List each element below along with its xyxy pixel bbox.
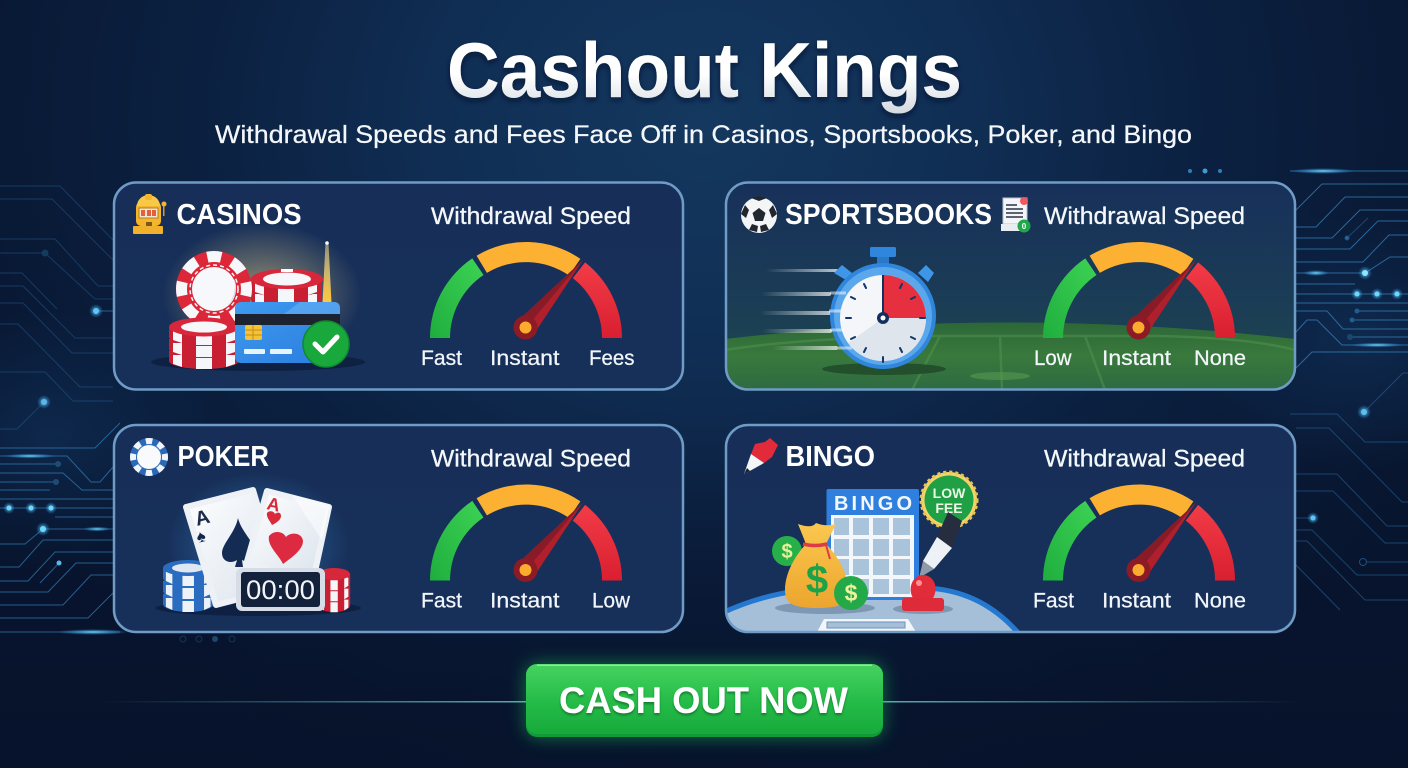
gauge: casinos xyxy=(430,242,622,340)
gauge labels: sportsbooks xyxy=(1034,347,1246,370)
illustration: cards, chips, timer: ♠ xyxy=(194,526,208,547)
money bag and coins: $ xyxy=(806,558,828,602)
gauge labels: casinos xyxy=(421,347,634,370)
gauge labels: bingo xyxy=(1033,590,1246,612)
money bag and coins: $ xyxy=(781,541,793,563)
low fee badge: LOW xyxy=(933,485,966,501)
marker and stamp xyxy=(902,512,962,611)
illustration: bingo card, money bag, badge, marker xyxy=(772,472,977,611)
gauge labels: poker: Instant xyxy=(490,590,560,612)
low fee badge: FEE xyxy=(935,500,963,516)
gauge labels: poker xyxy=(421,590,631,612)
gauge labels: poker: Fast xyxy=(421,590,462,612)
heading: poker: POKER xyxy=(178,441,269,473)
illustration: cards, chips, timer: 00:00 xyxy=(246,575,315,605)
bingo card xyxy=(826,489,919,600)
illustration: cards, chips, timer: A xyxy=(193,506,212,531)
label: withdrawal speed: Withdrawal Speed xyxy=(431,446,631,472)
illustration: stopwatch xyxy=(760,247,946,375)
gauge labels: bingo: Fast xyxy=(1033,590,1074,612)
circuit lines: right xyxy=(1290,171,1408,610)
panel: sportsbooks xyxy=(725,182,1295,390)
gauge labels: sportsbooks: Instant xyxy=(1102,347,1171,370)
gauge: sportsbooks xyxy=(1043,242,1235,340)
button: cash out now xyxy=(526,664,883,737)
heading: bingo: BINGO xyxy=(786,441,875,473)
icon: bet slip: 0 xyxy=(1022,222,1027,231)
gauge labels: casinos: Instant xyxy=(490,347,560,370)
gauge labels: casinos: Fast xyxy=(421,347,462,370)
label: withdrawal speed: Withdrawal Speed xyxy=(1044,203,1245,230)
illustration: chips and credit card xyxy=(151,223,365,371)
circuit glowing nodes: right xyxy=(1188,168,1403,524)
panel: casinos xyxy=(114,182,683,390)
gauge labels: sportsbooks: None xyxy=(1194,347,1246,370)
icon: bet slip xyxy=(1001,197,1030,232)
icon: soccer ball xyxy=(741,196,777,233)
icon: bingo marker xyxy=(744,438,778,474)
subtitle: Withdrawal Speeds and Fees Face Off in Casinos, Sportsbooks, Poker, and Bingo xyxy=(215,121,1192,149)
gauge labels: bingo: None xyxy=(1194,590,1246,612)
bingo card: BINGO xyxy=(834,493,912,515)
illustration: cards, chips, timer: A xyxy=(265,493,282,516)
gauge: poker xyxy=(430,485,622,582)
gauge labels: poker: Low xyxy=(592,590,631,612)
button connector lines xyxy=(100,701,1303,702)
football pitch xyxy=(725,322,1295,390)
gauge labels: casinos: Fees xyxy=(589,347,634,370)
label: withdrawal speed: Withdrawal Speed xyxy=(431,203,631,230)
panel: bingo xyxy=(720,425,1295,640)
panel: poker xyxy=(114,425,683,632)
gauge: bingo xyxy=(1043,485,1235,582)
heading: sportsbooks: SPORTSBOOKS xyxy=(785,199,992,231)
gauge labels: bingo: Instant xyxy=(1102,590,1171,612)
illustration: cards, chips, timer xyxy=(155,473,361,617)
money bag and coins xyxy=(772,523,868,610)
table surface xyxy=(725,586,1020,631)
icon: slot machine xyxy=(133,194,166,234)
circuit glowing nodes: left xyxy=(3,304,129,635)
circuit lines: left xyxy=(0,186,235,642)
low fee badge xyxy=(921,472,977,528)
money bag and coins: $ xyxy=(845,580,858,606)
button: cash out now: CASH OUT NOW xyxy=(559,680,848,721)
gauge labels: sportsbooks: Low xyxy=(1034,347,1072,370)
heading: casinos: CASINOS xyxy=(176,199,302,231)
label: withdrawal speed: Withdrawal Speed xyxy=(1044,446,1245,472)
icon: poker chip xyxy=(130,438,168,476)
title: Cashout Kings xyxy=(447,26,962,114)
